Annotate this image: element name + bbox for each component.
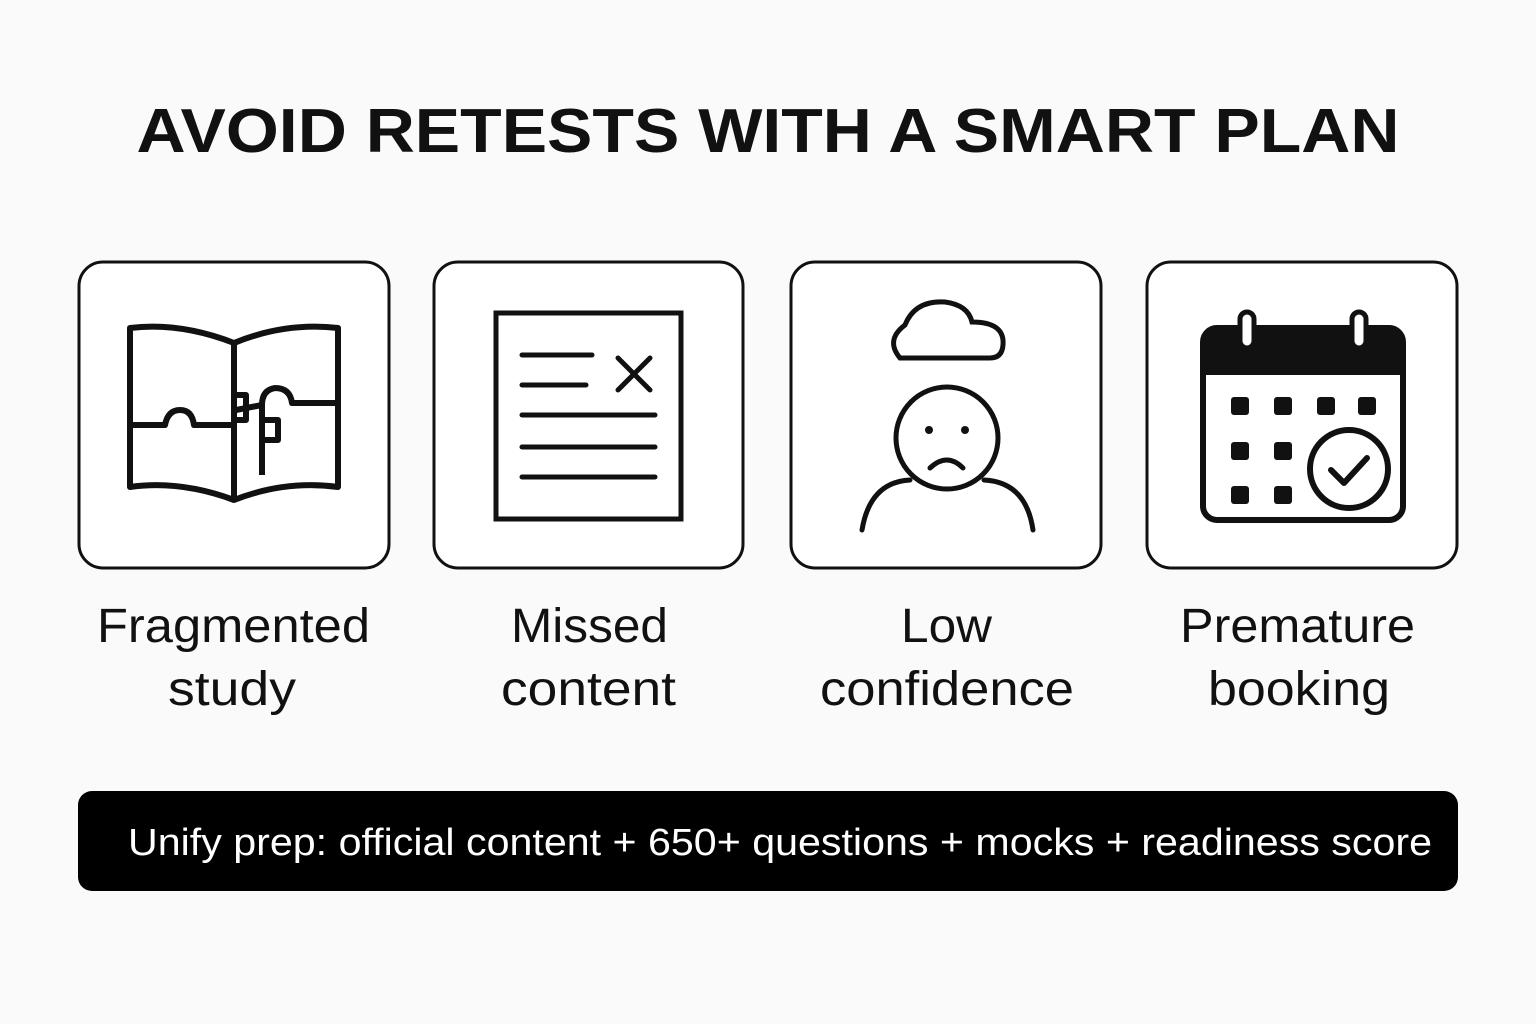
title: AVOID RETESTS WITH A SMART PLAN (136, 97, 1400, 166)
panel: low confidence (791, 262, 1101, 716)
label: Low (901, 600, 992, 653)
label: Premature (1180, 600, 1415, 653)
panel: missed content (434, 262, 743, 716)
icon: puzzle book (130, 327, 338, 500)
label: Fragmented (97, 600, 370, 653)
icon: calendar with check (1203, 312, 1403, 520)
icon: document with x (496, 313, 681, 519)
callout bar (78, 791, 1458, 891)
label: booking (1208, 663, 1390, 716)
callout bar: Unify prep: official content + 650+ questions + mocks + readiness score (128, 822, 1432, 864)
label: content (501, 663, 676, 716)
panel: fragmented study (79, 262, 389, 716)
panel: premature booking (1147, 262, 1457, 716)
label: Missed (511, 600, 668, 653)
label: confidence (820, 663, 1074, 716)
label: study (168, 663, 296, 716)
icon: sad person with cloud (862, 302, 1033, 530)
